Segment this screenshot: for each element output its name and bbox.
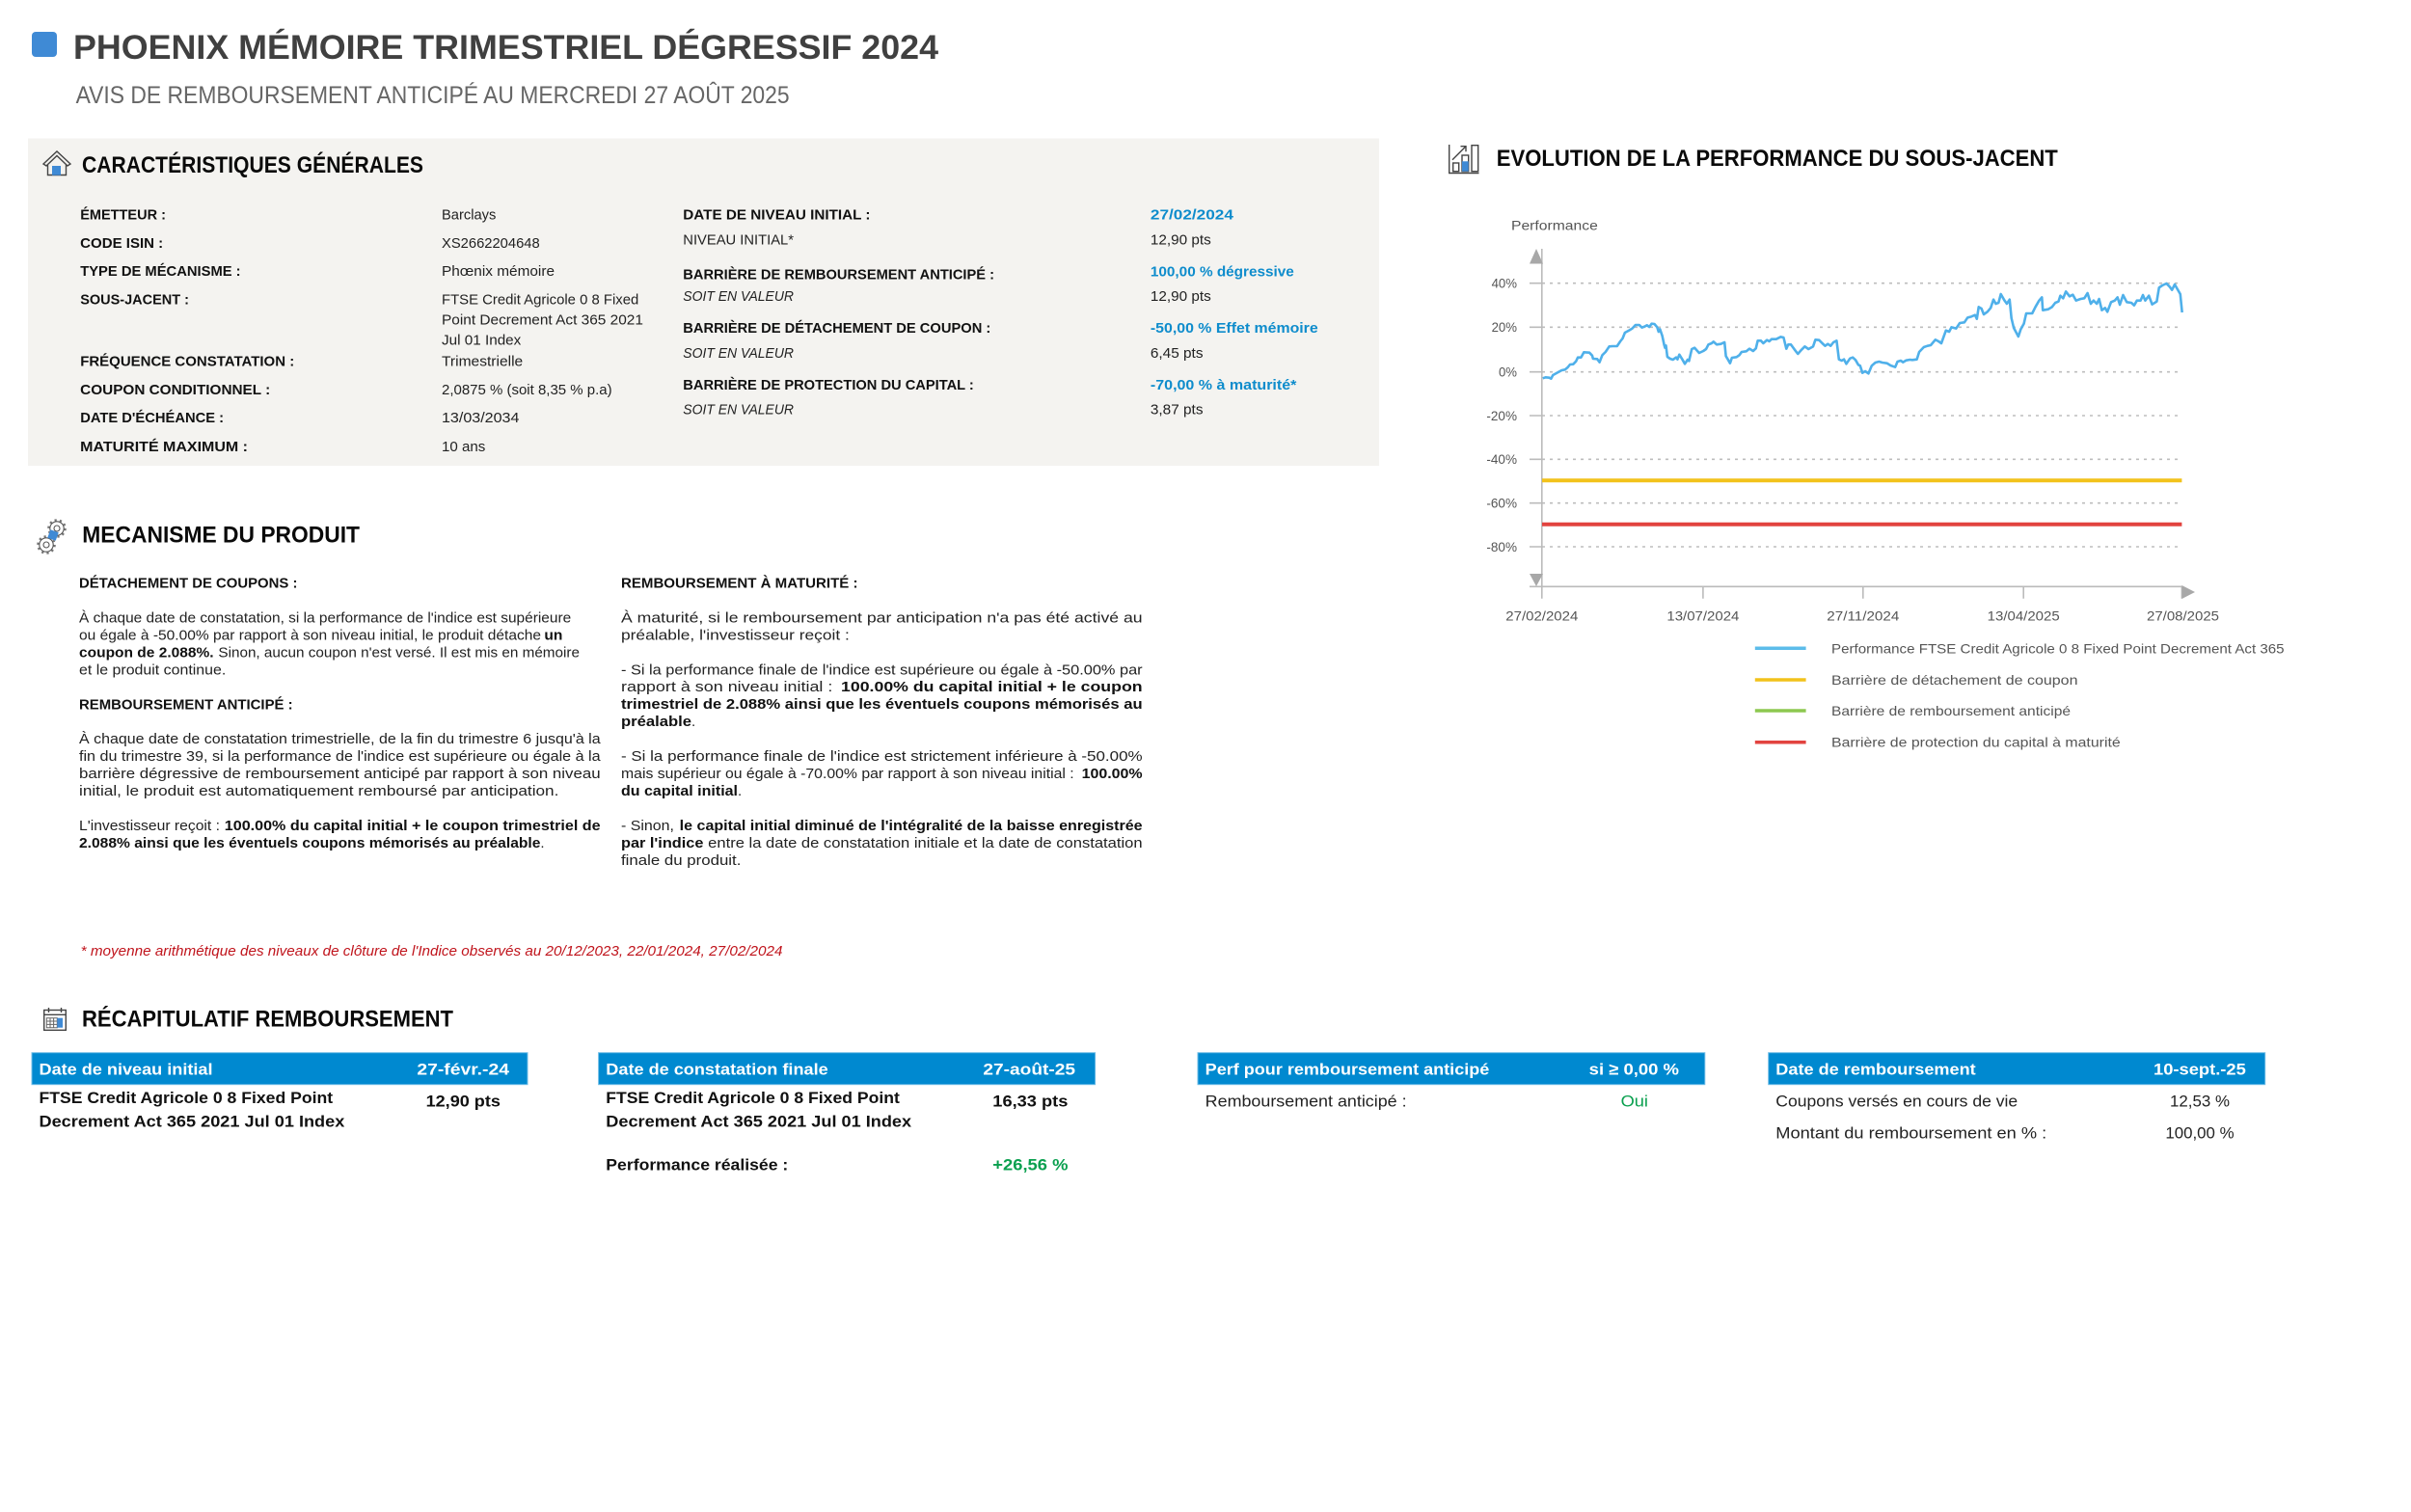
text block: mécanisme right column: finale du produit. [621, 852, 741, 869]
x axis labels: 27/08/2025 [2147, 608, 2219, 624]
footnote: * moyenne arithmétique des niveaux de clôture de l'Indice observés au 20/12/2023, 22/01/2024, 27/02/2024 [81, 943, 782, 959]
heading: caractéristiques générales: CARACTÉRISTIQUES GÉNÉRALES [82, 151, 423, 178]
text block: mécanisme left column: coupon de 2.088%. [79, 644, 214, 661]
right column labels: NIVEAU INITIAL* [683, 231, 794, 248]
right column labels: SOIT EN VALEUR [683, 288, 794, 305]
text block: mécanisme right column: préalable [621, 714, 691, 730]
text block: mécanisme left column: fin du trimestre 39, si la performance de l'indice est supérieure ou égale à la [79, 748, 601, 765]
table: date de constatation finale: Date de constatation finale [606, 1060, 828, 1078]
table: date de niveau initial [32, 1053, 528, 1130]
icon: gears [38, 520, 66, 554]
text block: mécanisme right column: trimestriel de 2.088% ainsi que les éventuels coupons mémorisés au [621, 696, 1143, 713]
text block: mécanisme right column: 100.00% du capital initial + le coupon [841, 679, 1143, 695]
legend: Performance FTSE Credit Agricole 0 8 Fixed Point Decrement Act 365 [1831, 640, 2285, 656]
barrier line: détachement de coupon [1542, 478, 2181, 482]
text block: mécanisme right column: le capital initial diminué de l'intégralité de la baisse enregistrée [680, 818, 1143, 834]
text block: mécanisme left column: barrière dégressive de remboursement anticipé par rapport à son niveau [79, 766, 601, 782]
text block: mécanisme left column: REMBOURSEMENT ANTICIPÉ : [79, 696, 293, 713]
left column values: Point Decrement Act 365 2021 [442, 312, 643, 329]
text block: mécanisme left column: À chaque date de constatation, si la performance de l'indice est supérieure [79, 609, 571, 626]
text block: mécanisme right column: du capital initial [621, 783, 738, 799]
left column values: 2,0875 % (soit 8,35 % p.a) [442, 382, 612, 398]
subtitle: AVIS DE REMBOURSEMENT ANTICIPÉ AU MERCREDI 27 AOÛT 2025 [76, 81, 790, 109]
left column labels: TYPE DE MÉCANISME : [80, 263, 241, 280]
line chart: performance [1486, 217, 2285, 750]
left column values: Jul 01 Index [442, 332, 522, 348]
right column labels [683, 207, 994, 418]
right column values: 12,90 pts [1151, 231, 1211, 248]
left column values: Barclays [442, 207, 496, 224]
text block: mécanisme left column: initial, le produit est automatiquement remboursé par anticipation. [79, 783, 558, 799]
text block: mécanisme right column: préalable, l'investisseur reçoit : [621, 627, 850, 643]
table: date de niveau initial: Date de niveau initial [39, 1060, 212, 1078]
table: date de constatation finale: FTSE Credit Agricole 0 8 Fixed Point [606, 1089, 900, 1107]
right column labels: BARRIÈRE DE DÉTACHEMENT DE COUPON : [683, 320, 990, 337]
x axis labels: 27/11/2024 [1827, 608, 1900, 624]
left column labels: MATURITÉ MAXIMUM : [80, 439, 248, 455]
text block: mécanisme left column: DÉTACHEMENT DE COUPONS : [79, 575, 297, 591]
right column labels: BARRIÈRE DE PROTECTION DU CAPITAL : [683, 377, 974, 393]
left column values [442, 207, 643, 455]
y axis labels: -80% [1486, 539, 1517, 554]
table: date de constatation finale: +26,56 % [992, 1155, 1068, 1174]
text block: mécanisme left column: 2.088% ainsi que les éventuels coupons mémorisés au préalable [79, 835, 540, 851]
text block: mécanisme right column: REMBOURSEMENT À MATURITÉ : [621, 575, 858, 591]
table: date de remboursement: Montant du remboursement en % : [1775, 1123, 2046, 1142]
performance line [1543, 284, 2182, 379]
text block: mécanisme left column: L'investisseur reçoit : [79, 818, 220, 834]
table: date de constatation finale: 16,33 pts [992, 1093, 1068, 1111]
left column values: 10 ans [442, 439, 485, 455]
text block: mécanisme left column: À chaque date de constatation trimestrielle, de la fin du trimestre 6 jusqu'à la [79, 731, 601, 747]
table: date de constatation finale: Performance réalisée : [606, 1155, 788, 1174]
x axis labels: 27/02/2024 [1505, 608, 1579, 624]
icon: bar chart [1449, 145, 1479, 174]
text block: mécanisme right column: - Sinon, [621, 818, 674, 834]
table: perf pour remboursement anticipé [1198, 1053, 1705, 1111]
table: date de remboursement: 100,00 % [2165, 1123, 2235, 1142]
right column values [1151, 207, 1318, 418]
text block: mécanisme right column: - Si la performance finale de l'indice est supérieure ou égale à -50.00% par [621, 662, 1143, 678]
grid lines [1530, 284, 2181, 547]
text block: mécanisme right column [621, 575, 1143, 869]
right column labels: BARRIÈRE DE REMBOURSEMENT ANTICIPÉ : [683, 266, 994, 283]
left column values: FTSE Credit Agricole 0 8 Fixed [442, 292, 638, 309]
x axis labels [1505, 608, 2219, 624]
text block: mécanisme right column: rapport à son niveau initial : [621, 679, 832, 695]
table: date de constatation finale: Decrement Act 365 2021 Jul 01 Index [606, 1112, 912, 1130]
text block: mécanisme left column: un [544, 627, 562, 643]
text block: mécanisme right column: entre la date de constatation initiale et la date de constatation [708, 835, 1143, 851]
table: date de remboursement: Coupons versés en cours de vie [1775, 1093, 2018, 1111]
y axis labels: -40% [1486, 451, 1517, 467]
table: date de niveau initial: 27-févr.-24 [417, 1060, 510, 1078]
text block: mécanisme right column: . [691, 714, 695, 730]
text block: mécanisme left column: ou égale à -50.00% par rapport à son niveau initial, le produit détache [79, 627, 541, 643]
heading: récapitulatif remboursement: RÉCAPITULATIF REMBOURSEMENT [82, 1006, 453, 1033]
text block: mécanisme right column: par l'indice [621, 835, 703, 851]
left column values: 13/03/2034 [442, 410, 519, 426]
table: date de remboursement: 10-sept.-25 [2154, 1060, 2246, 1078]
text block: mécanisme right column: - Si la performance finale de l'indice est strictement inférieure à -50.00% [621, 748, 1143, 765]
left column labels: DATE D'ÉCHÉANCE : [80, 410, 224, 426]
right column values: 100,00 % dégressive [1151, 264, 1294, 281]
table: date de constatation finale: 27-août-25 [983, 1060, 1075, 1078]
y axis labels: 20% [1492, 319, 1517, 335]
table: date de remboursement [1769, 1053, 2265, 1142]
text block: mécanisme left column: 100.00% du capital initial + le coupon trimestriel de [225, 818, 601, 834]
left column values: Phœnix mémoire [442, 263, 555, 280]
text block: mécanisme left column: et le produit continue. [79, 662, 226, 678]
x axis labels: 13/04/2025 [1988, 608, 2060, 624]
legend: Barrière de détachement de coupon [1831, 672, 2077, 688]
right column values: 27/02/2024 [1151, 207, 1234, 224]
y axis labels: -60% [1486, 496, 1517, 511]
heading: mécanisme du produit: MECANISME DU PRODUIT [82, 523, 360, 549]
legend [1755, 640, 2285, 750]
legend: Barrière de remboursement anticipé [1831, 703, 2071, 718]
right column values: -50,00 % Effet mémoire [1151, 320, 1318, 337]
right column values: -70,00 % à maturité* [1151, 377, 1297, 393]
text block: mécanisme right column: . [738, 783, 742, 799]
table: perf pour remboursement anticipé: Oui [1621, 1093, 1648, 1111]
table: date de constatation finale [599, 1053, 1096, 1174]
y axis labels [1486, 276, 1517, 554]
right column values: 6,45 pts [1151, 345, 1204, 362]
table: date de remboursement: 12,53 % [2170, 1093, 2230, 1111]
left column labels: FRÉQUENCE CONSTATATION : [80, 354, 294, 370]
text block: mécanisme left column [79, 575, 601, 851]
x axis labels: 13/07/2024 [1666, 608, 1740, 624]
table: perf pour remboursement anticipé: Perf pour remboursement anticipé [1206, 1060, 1489, 1078]
barrier line: protection du capital [1542, 523, 2181, 526]
left column labels: COUPON CONDITIONNEL : [80, 382, 270, 398]
left column labels: SOUS-JACENT : [80, 292, 189, 309]
right column values: 3,87 pts [1151, 402, 1204, 418]
left column labels: CODE ISIN : [80, 235, 163, 252]
title: PHOENIX MÉMOIRE TRIMESTRIEL DÉGRESSIF 2024 [73, 28, 939, 67]
heading: évolution de la performance: EVOLUTION DE LA PERFORMANCE DU SOUS-JACENT [1497, 146, 2058, 172]
y axis title: Performance [1511, 217, 1598, 232]
text block: mécanisme right column: 100.00% [1082, 766, 1143, 782]
right column values: 12,90 pts [1151, 288, 1211, 305]
table: perf pour remboursement anticipé: si ≥ 0,00 % [1589, 1060, 1679, 1078]
table: perf pour remboursement anticipé: Remboursement anticipé : [1206, 1093, 1407, 1111]
y axis labels: 0% [1499, 364, 1517, 380]
left column labels: ÉMETTEUR : [80, 207, 166, 224]
left column values: XS2662204648 [442, 235, 540, 252]
table: date de remboursement: Date de remboursement [1775, 1060, 1976, 1078]
panel: caractéristiques générales [28, 139, 1379, 466]
icon: house [43, 151, 70, 176]
text block: mécanisme left column: . [540, 835, 545, 851]
text block: mécanisme right column: mais supérieur ou égale à -70.00% par rapport à son niveau initial : [621, 766, 1074, 782]
left column values: Trimestrielle [442, 354, 523, 370]
y axis labels: -20% [1486, 408, 1517, 423]
y axis labels: 40% [1492, 276, 1517, 291]
right column labels: DATE DE NIVEAU INITIAL : [683, 207, 870, 224]
table: date de niveau initial: 12,90 pts [426, 1093, 501, 1111]
right column labels: SOIT EN VALEUR [683, 402, 794, 418]
right column labels: SOIT EN VALEUR [683, 345, 794, 362]
legend: Barrière de protection du capital à maturité [1831, 735, 2121, 750]
text block: mécanisme right column: À maturité, si le remboursement par anticipation n'a pas été activé au [621, 609, 1143, 626]
text block: mécanisme left column: Sinon, aucun coupon n'est versé. Il est mis en mémoire [218, 644, 580, 661]
left column labels [80, 207, 294, 455]
icon: calendar [44, 1008, 66, 1030]
title marker [32, 32, 57, 57]
table: date de niveau initial: FTSE Credit Agricole 0 8 Fixed Point [39, 1089, 333, 1107]
axes [1530, 249, 2195, 599]
table: date de niveau initial: Decrement Act 365 2021 Jul 01 Index [39, 1112, 345, 1130]
